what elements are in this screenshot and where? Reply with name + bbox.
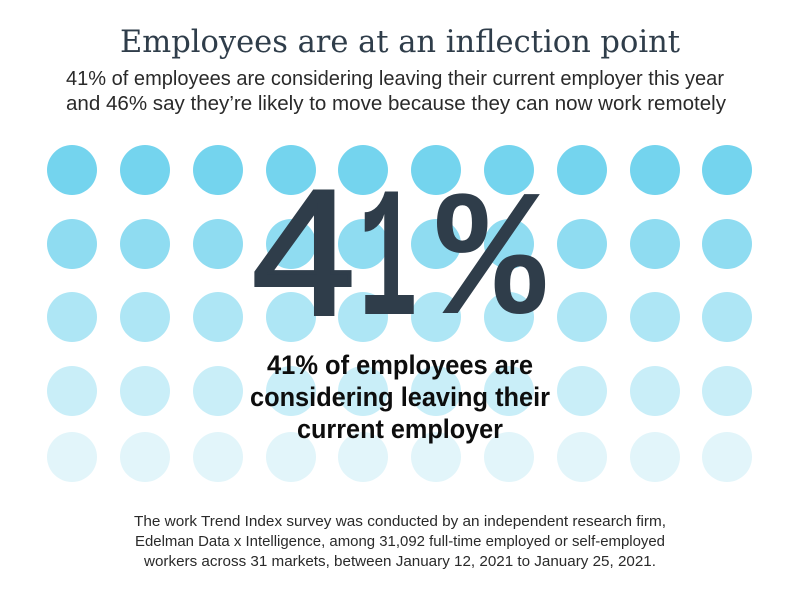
big statistic 41%: 1 — [358, 159, 418, 370]
big statistic 41%: % — [437, 164, 546, 368]
subtitle: and 46% say they’re likely to move because they can now work remotely — [66, 93, 726, 115]
bold caption: current employer — [297, 414, 503, 444]
dot grid: 50 circles fading by row — [47, 145, 752, 482]
source note: Edelman Data x Intelligence, among 31,092 full-time employed or self-employed — [135, 533, 665, 550]
bold caption — [250, 350, 550, 444]
big statistic 41%: 4 — [247, 159, 359, 370]
source note — [134, 513, 666, 570]
bold caption: considering leaving their — [250, 382, 550, 412]
bold caption: 41% of employees are — [267, 350, 533, 380]
subtitle — [66, 68, 726, 115]
source note: workers across 31 markets, between January 12, 2021 to January 25, 2021. — [143, 553, 656, 570]
title: Employees are at an inflection point — [120, 24, 681, 60]
source note: The work Trend Index survey was conducted by an independent research firm, — [134, 513, 666, 530]
subtitle: 41% of employees are considering leaving their current employer this year — [66, 68, 724, 90]
